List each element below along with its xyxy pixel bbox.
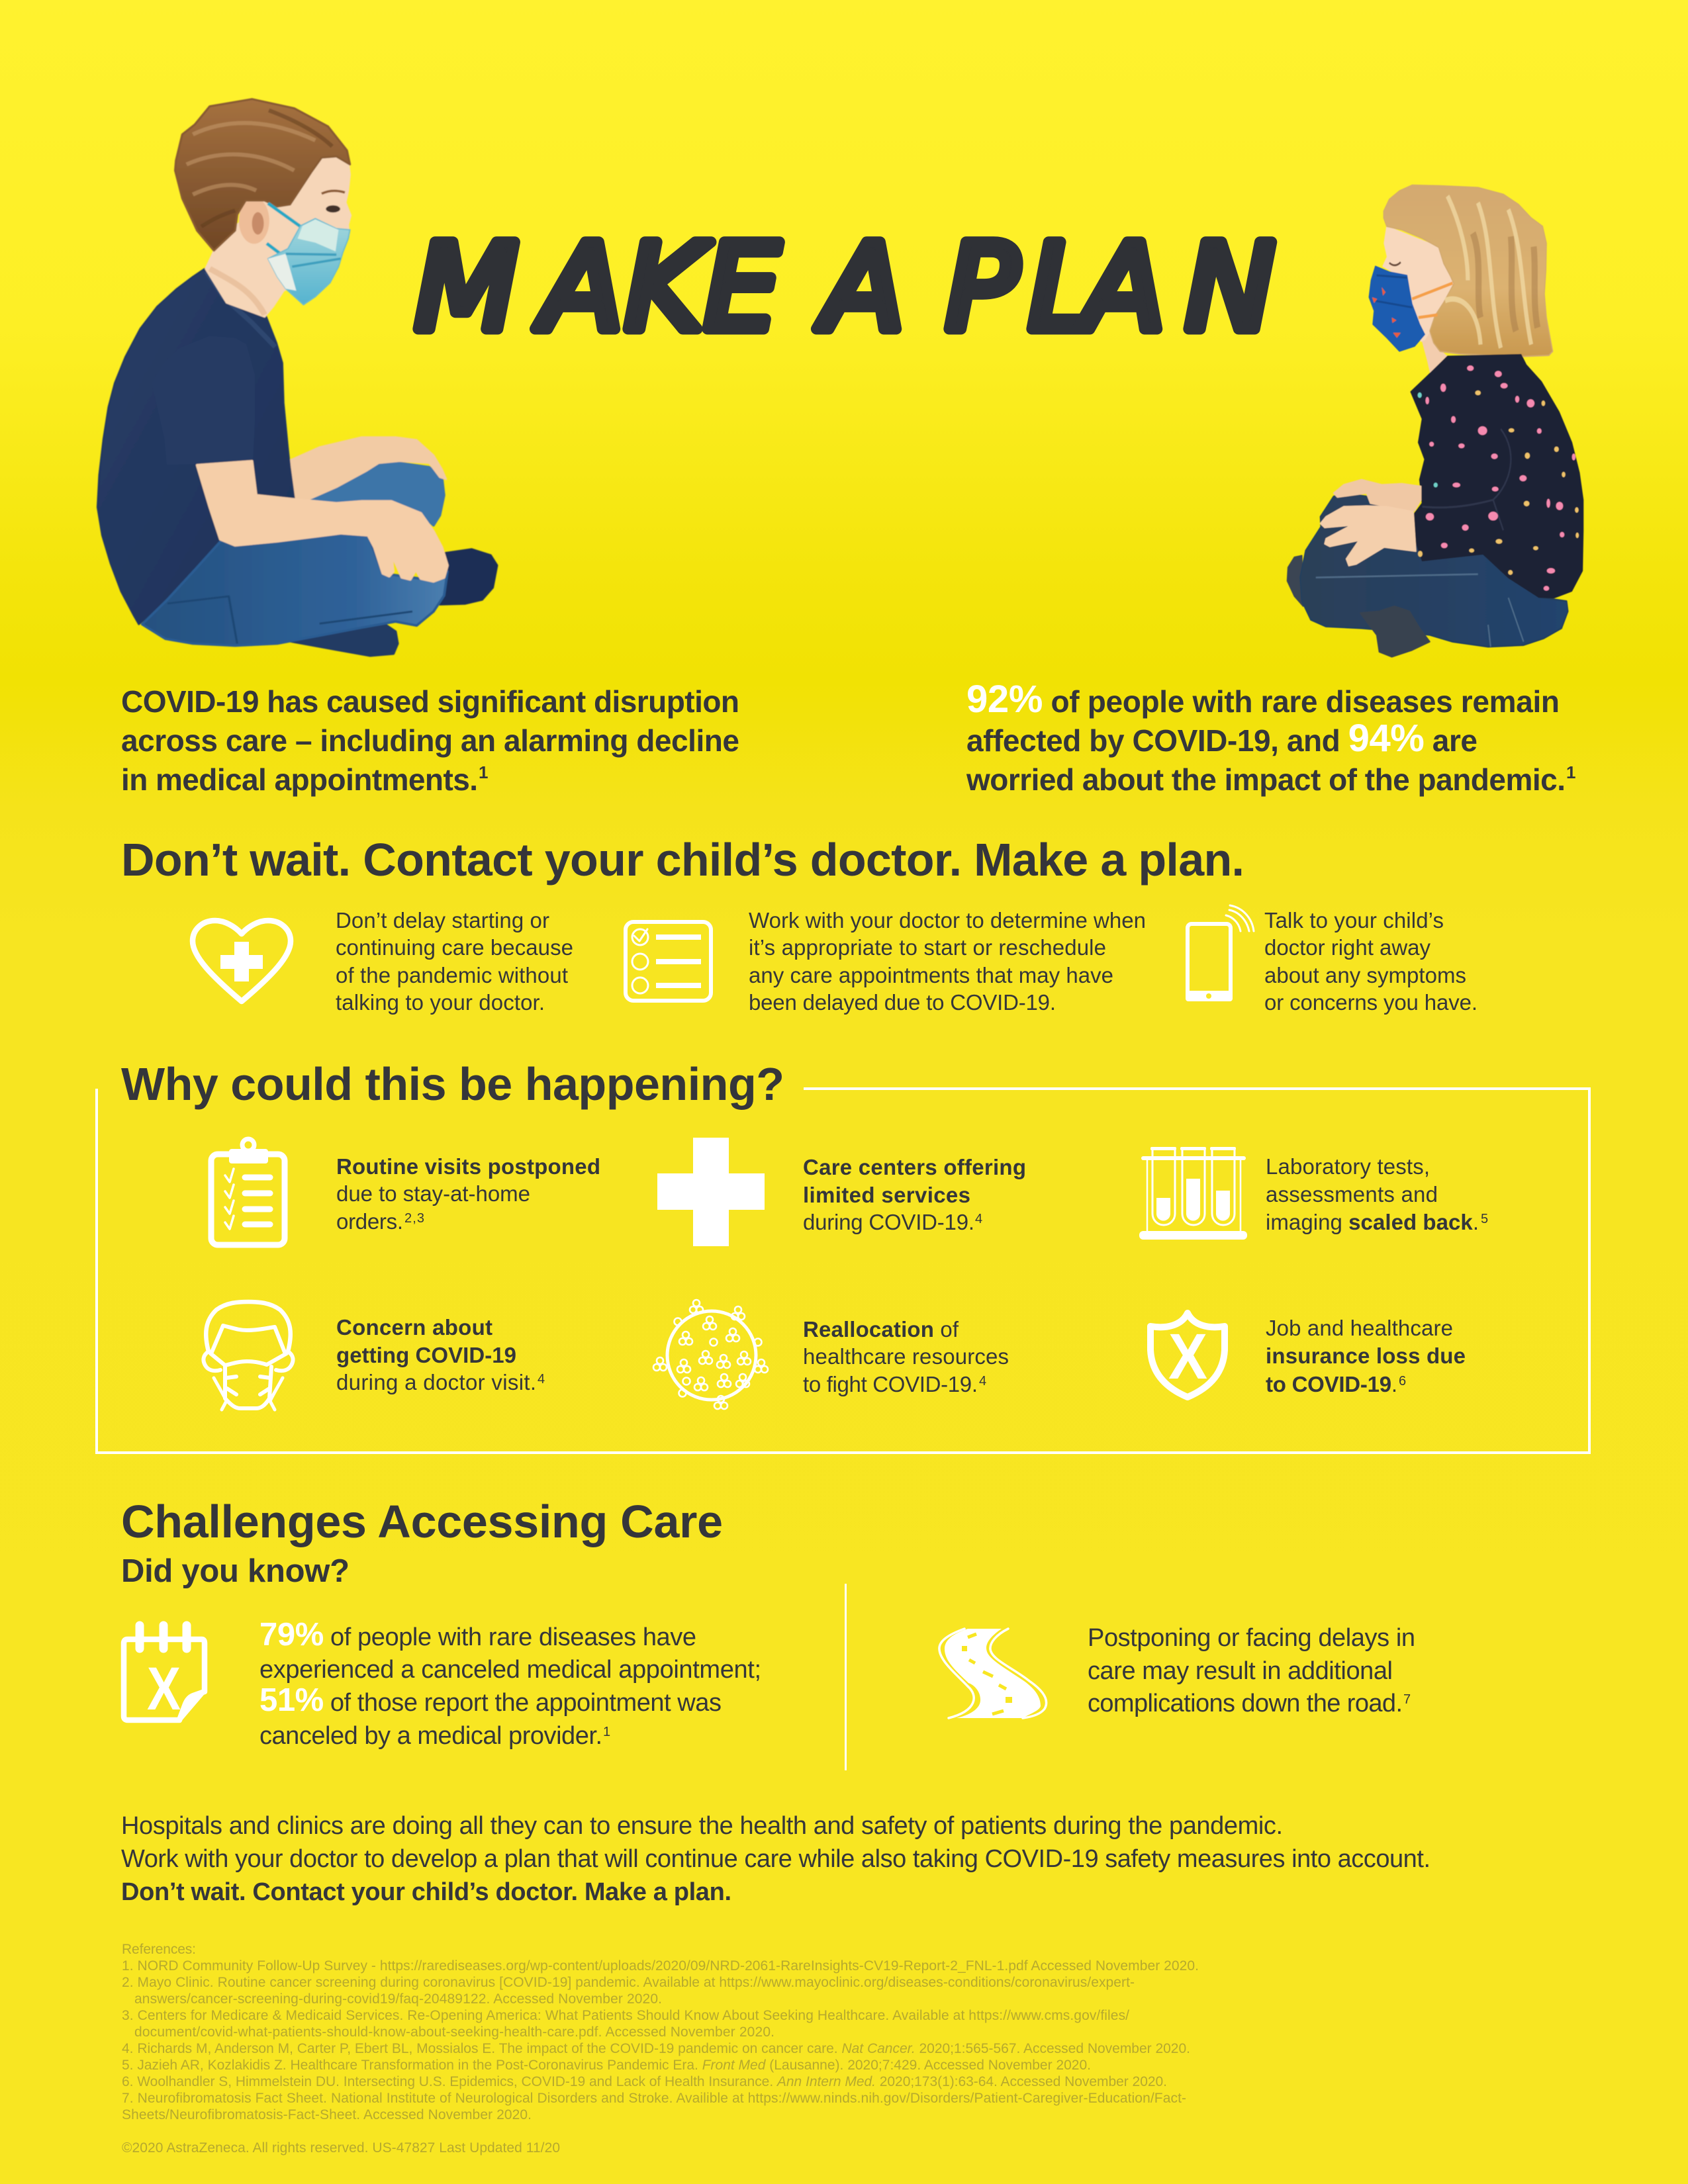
icon: test tubes: [1139, 1147, 1247, 1240]
text: 79% and 51% statistics: 1: [603, 1725, 610, 1739]
icon: calendar with X: [124, 1625, 207, 1723]
intro text: rare disease statistics: 1: [1566, 762, 1575, 782]
text: routine visits: [336, 1154, 600, 1234]
panel: reasons box: [97, 1089, 1589, 1453]
icon: calendar with X: X: [147, 1655, 181, 1723]
text: talk to your child's doctor: or concerns you have.: [1264, 990, 1477, 1015]
references: answers/cancer-screening-during-covid19/faq-20489122. Accessed November 2020.: [134, 1991, 662, 2007]
icon: clipboard: [211, 1139, 285, 1245]
references: 5. Jazieh AR, Kozlakidis Z. Healthcare Transformation in the Post-Coronavirus Pandemic Era. Front Med (Lausanne). 2020;7:429. Accessed November 2020.: [122, 2058, 1091, 2073]
text: talk to your child's doctor: [1264, 908, 1477, 1015]
references: 2. Mayo Clinic. Routine cancer screening during coronavirus [COVID-19] pandemic. Available at https://www.mayoclinic.org/diseases-conditions/coronavirus/expert-: [122, 1975, 1135, 1990]
references: 4. Richards M, Anderson M, Carter P, Ebert BL, Mossialos E. The impact of the COVID-19 pandemic on cancer care. Nat Cancer. 2020;1:565-567. Accessed November 2020.: [122, 2041, 1190, 2056]
text: reallocation: healthcare resources: [803, 1344, 1009, 1369]
text: 79% and 51% statistics: [259, 1617, 761, 1750]
intro text: disruption of care: COVID-19 has caused significant disruption: [121, 684, 739, 719]
text: reallocation: 4: [979, 1374, 986, 1388]
action row: three steps: [193, 905, 1477, 1015]
text: work with your doctor: it’s appropriate to start or reschedule: [749, 935, 1106, 960]
text: laboratory tests: imaging scaled back.: [1266, 1210, 1479, 1234]
copyright: ©2020 AstraZeneca. All rights reserved. US-47827 Last Updated 11/20: [122, 2140, 560, 2156]
text: care centers: during COVID-19.: [803, 1210, 974, 1234]
references: 6. Woolhandler S, Himmelstein DU. Intersecting U.S. Epidemics, COVID-19 and Lack of Health Insurance. Ann Intern Med. 2020;173(1):63-64. Accessed November 2020.: [122, 2074, 1167, 2089]
references: Sheets/Neurofibromatosis-Fact-Sheet. Accessed November 2020.: [122, 2107, 532, 2122]
closing message: [121, 1812, 1430, 1906]
text: reallocation: Reallocation of: [803, 1317, 959, 1342]
text: routine visits: orders.: [336, 1209, 403, 1234]
icon: heart with cross: [193, 921, 291, 1001]
text: concern about covid: Concern about: [336, 1315, 492, 1340]
text: postponing care: [1088, 1624, 1415, 1717]
text: 79% and 51% statistics: canceled by a medical provider.: [259, 1722, 602, 1750]
text: work with your doctor: Work with your doctor to determine when: [749, 908, 1146, 933]
icon: shield with X: X: [1168, 1320, 1207, 1392]
text: laboratory tests: [1266, 1154, 1488, 1234]
icon: virus: [653, 1300, 768, 1409]
text: talk to your child's doctor: Talk to your child’s: [1264, 908, 1444, 933]
text: 79% and 51% statistics: 51% of those report the appointment was: [259, 1682, 722, 1718]
text: reallocation: to fight COVID-19.: [803, 1372, 978, 1396]
title: MAKE A PLAN: [415, 219, 1275, 357]
icon: winding road: [939, 1629, 1047, 1718]
text: care centers: Care centers offering: [803, 1155, 1026, 1179]
divider: [845, 1584, 847, 1770]
intro text: disruption of care: in medical appointments.: [121, 762, 478, 797]
text: job and insurance loss: 6: [1399, 1374, 1406, 1388]
text: concern about covid: 4: [538, 1372, 545, 1387]
references: [122, 1942, 1199, 2122]
text: concern about covid: [336, 1315, 545, 1394]
references: References:: [122, 1942, 196, 1957]
text: don't delay: [336, 908, 573, 1015]
text: postponing care: complications down the road.: [1088, 1690, 1403, 1717]
icon: face mask: [203, 1302, 293, 1410]
text: work with your doctor: [749, 908, 1146, 1015]
text: postponing care: care may result in additional: [1088, 1657, 1393, 1685]
closing message: Hospitals and clinics are doing all they can to ensure the health and safety of patients during the pandemic.: [121, 1812, 1283, 1840]
intro text: disruption of care: across care – including an alarming decline: [121, 723, 739, 758]
text: concern about covid: during a doctor visit.: [336, 1370, 536, 1394]
intro text: rare disease statistics: affected by COVID-19, and 94% are: [966, 717, 1477, 760]
intro text: rare disease statistics: worried about the impact of the pandemic.: [966, 762, 1566, 797]
icon: phone with signal: [1186, 905, 1254, 1001]
intro text: rare disease statistics: 92% of people with rare diseases remain: [966, 678, 1560, 721]
text: work with your doctor: been delayed due to COVID-19.: [749, 990, 1056, 1015]
references: 7. Neurofibromatosis Fact Sheet. National Institute of Neurological Disorders and Stroke. Availible at https://www.ninds.nih.gov/Disorders/Patient-Caregiver-Education/Fact-: [122, 2091, 1186, 2106]
icon: shield with X: [1150, 1313, 1225, 1397]
intro text: disruption of care: [121, 684, 739, 797]
references: 3. Centers for Medicare & Medicaid Services. Re-Opening America: What Patients Should Know About Seeking Healthcare. Available at https://www.cms.gov/files/: [122, 2008, 1129, 2023]
heading: don't wait: Don’t wait. Contact your child’s doctor. Make a plan.: [121, 834, 1244, 886]
photo: boy wearing mask: [97, 99, 497, 656]
text: job and insurance loss: Job and healthcare: [1266, 1316, 1453, 1340]
text: concern about covid: getting COVID-19: [336, 1343, 516, 1367]
subheading: did you know: Did you know?: [121, 1553, 350, 1589]
text: routine visits: 2,3: [404, 1211, 424, 1226]
text: routine visits: Routine visits postponed: [336, 1154, 600, 1179]
intro text: rare disease statistics: [966, 678, 1575, 797]
text: job and insurance loss: insurance loss due: [1266, 1343, 1466, 1368]
intro text: disruption of care: 1: [479, 762, 488, 782]
text: job and insurance loss: to COVID-19.: [1266, 1372, 1397, 1396]
text: work with your doctor: any care appointments that may have: [749, 963, 1113, 987]
text: job and insurance loss: [1266, 1316, 1466, 1396]
closing message: Don’t wait. Contact your child’s doctor. Make a plan.: [121, 1878, 731, 1906]
text: talk to your child's doctor: about any symptoms: [1264, 963, 1466, 987]
text: don't delay: Don’t delay starting or: [336, 908, 549, 933]
heading: why could this be happening: Why could this be happening?: [121, 1058, 784, 1110]
text: care centers: [803, 1155, 1026, 1234]
closing message: Work with your doctor to develop a plan that will continue care while also taking COVID-19 safety measures into account.: [121, 1845, 1430, 1873]
text: laboratory tests: assessments and: [1266, 1182, 1438, 1206]
text: postponing care: Postponing or facing delays in: [1088, 1624, 1415, 1652]
photo: girl wearing mask: [1288, 185, 1583, 657]
icon: checklist: [626, 922, 711, 1001]
references: 1. NORD Community Follow-Up Survey - https://rarediseases.org/wp-content/uploads/2020/09/NRD-2061-RareInsights-CV19-Report-2_FNL-1.pdf Accessed November 2020.: [122, 1958, 1199, 1974]
text: don't delay: talking to your doctor.: [336, 990, 545, 1015]
text: laboratory tests: Laboratory tests,: [1266, 1154, 1430, 1179]
references: document/covid-what-patients-should-know-about-seeking-health-care.pdf. Accessed November 2020.: [134, 2025, 774, 2040]
text: don't delay: of the pandemic without: [336, 963, 568, 987]
text: care centers: 4: [975, 1212, 982, 1226]
text: care centers: limited services: [803, 1183, 970, 1207]
text: laboratory tests: 5: [1481, 1212, 1488, 1226]
text: postponing care: 7: [1403, 1692, 1411, 1707]
icon: medical cross: [657, 1138, 765, 1246]
text: talk to your child's doctor: doctor right away: [1264, 935, 1431, 960]
text: routine visits: due to stay-at-home: [336, 1181, 530, 1206]
heading: challenges accessing care: Challenges Accessing Care: [121, 1496, 723, 1547]
panel outline: [97, 1089, 1589, 1453]
text: don't delay: continuing care because: [336, 935, 573, 960]
text: reallocation: [803, 1317, 1009, 1396]
text: 79% and 51% statistics: experienced a canceled medical appointment;: [259, 1656, 761, 1684]
text: 79% and 51% statistics: 79% of people with rare diseases have: [259, 1617, 696, 1653]
